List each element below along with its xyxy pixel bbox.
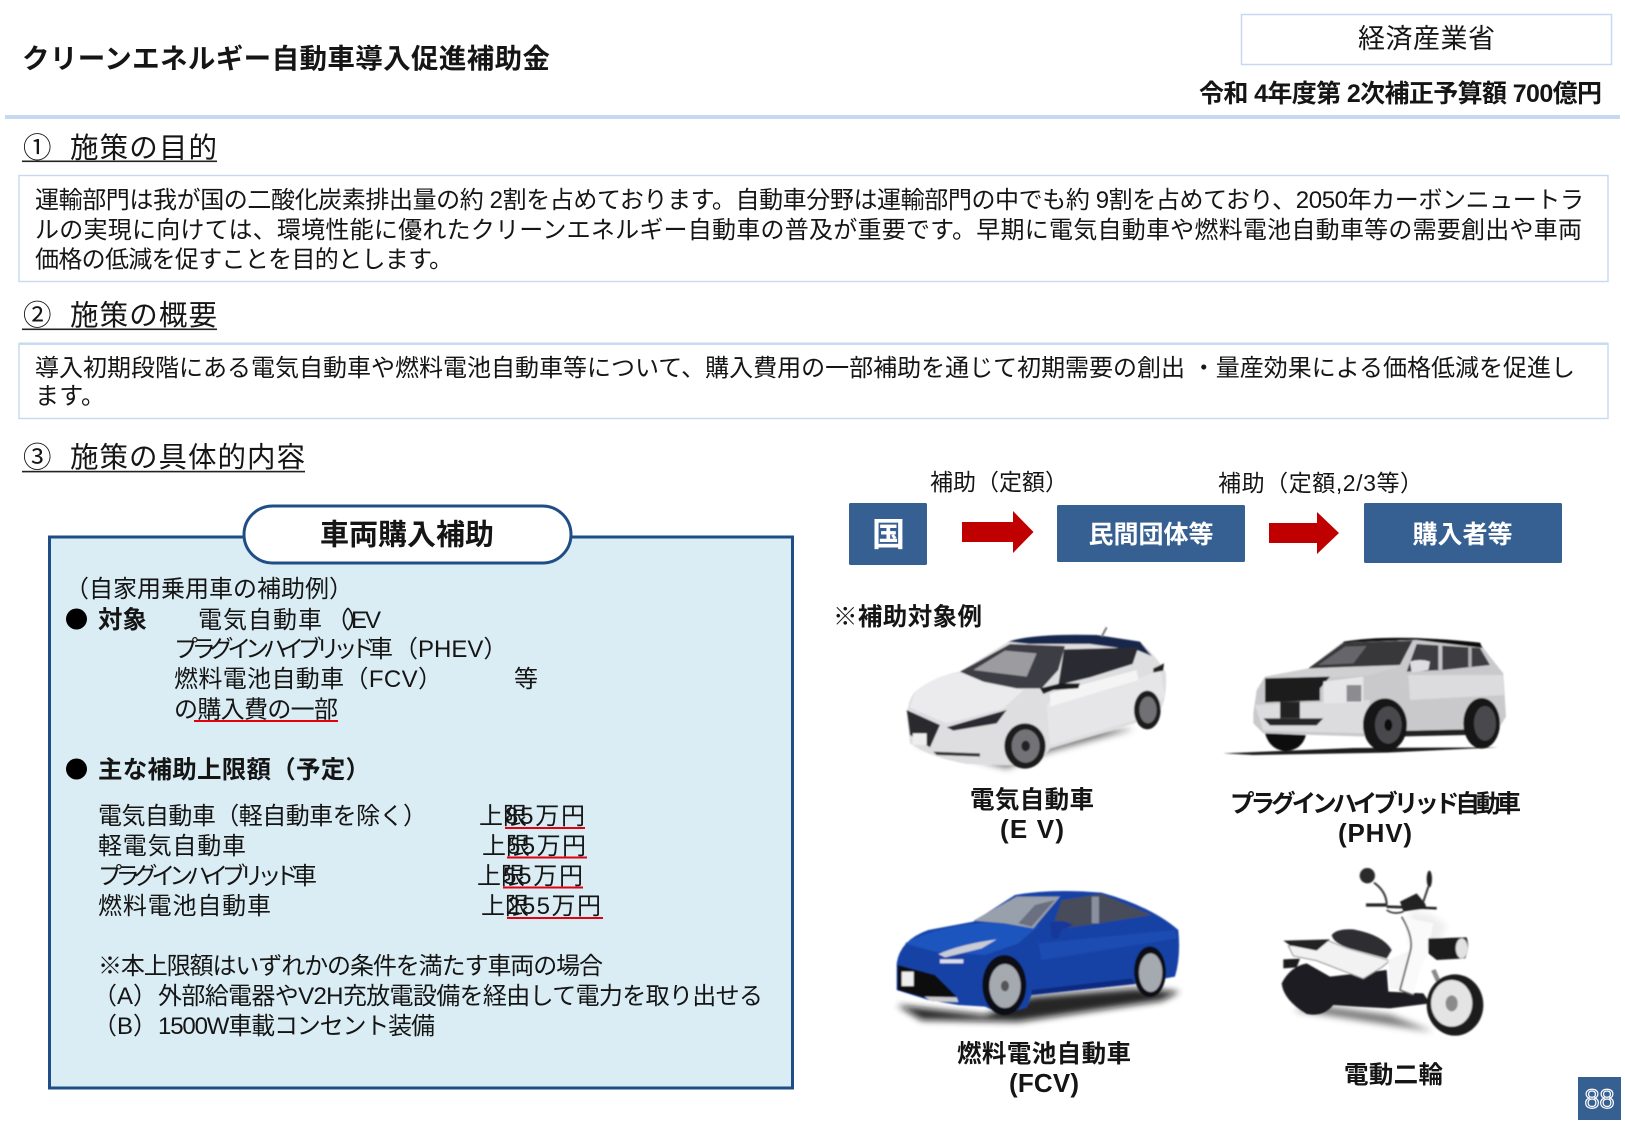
heading: section 1: 施策の目的 (70, 132, 217, 164)
subsidy cap rows: 上限 (481, 893, 529, 920)
flow box: country (849, 503, 927, 565)
page number: 88 (1584, 1084, 1615, 1114)
subsidy cap rows (98, 803, 603, 920)
panel: vehicle purchase subsidy (50, 506, 792, 1088)
panel: overview text: ます。 (35, 383, 105, 410)
flow box: country: 国 (872, 516, 905, 553)
subsidy cap heading: 主な補助上限額（予定） (98, 756, 370, 784)
target vehicles list: の購入費の一部 (174, 696, 338, 724)
subsidy cap rows: 上限 (482, 833, 530, 860)
label: FCV: 燃料電池自動車 (957, 1040, 1131, 1068)
image: electric vehicle (907, 627, 1166, 769)
label: EV: (E V) (1000, 814, 1064, 844)
image: electric scooter (1282, 868, 1483, 1036)
flow label: fixed and two-thirds subsidy: 補助（定額,2/3等） (1218, 470, 1423, 496)
conditions note: 外部給電器やV2H充放電設備を経由して電力を取り出せる (158, 983, 763, 1010)
panel: purpose text (19, 176, 1608, 282)
page number (1578, 1077, 1621, 1120)
heading: section 2: ② (23, 300, 52, 332)
title: クリーンエネルギー自動車導入促進補助金 (22, 43, 550, 74)
ministry label box: 経済産業省 (1358, 24, 1495, 54)
flow box: purchasers (1364, 503, 1562, 563)
target vehicles list: 対象 (98, 606, 147, 634)
panel: overview text: 導入初期段階にある電気自動車や燃料電池自動車等について、購入費用の一部補助を通じて初期需要の創出 ・量産効果による価格低減を促進し (35, 355, 1575, 382)
label: PHV: (PHV) (1338, 818, 1412, 848)
panel: purpose text: 運輸部門は我が国の二酸化炭素排出量の約 2割を占めております。自動車分野は運輸部門の中でも約 9割を占めており、2050年カーボンニュートラ (35, 187, 1584, 214)
subsidy cap rows: 燃料電池自動車 (98, 893, 271, 920)
pill heading: 車両購入補助 (320, 518, 494, 552)
flow box: private organisations: 民間団体等 (1088, 521, 1214, 549)
subsidy cap rows: プラグインハイブリッド車 (98, 863, 317, 890)
label: PHV (1230, 789, 1521, 848)
conditions note (93, 953, 763, 1040)
label: PHV: プラグインハイブリッド自動車 (1230, 789, 1521, 818)
subsidy cap rows: 55万円 (507, 833, 586, 860)
target vehicles list: ） (346, 607, 370, 634)
arrow: country to organisations (962, 511, 1034, 553)
heading: section 3: 施策の具体的内容 (70, 442, 305, 474)
flow label: fixed subsidy: 補助（定額） (930, 469, 1068, 495)
label: electric two-wheeler: 電動二輪 (1344, 1061, 1444, 1089)
target vehicles list: 燃料電池自動車（FCV） (174, 666, 442, 693)
heading: section 1: ① (23, 132, 52, 164)
subsidised examples heading: ※補助対象例 (833, 603, 982, 631)
subsidy cap rows: 255万円 (507, 893, 601, 920)
budget amount: 令和 4年度第 2次補正予算額 700億円 (1199, 80, 1602, 108)
target vehicles list: EV (351, 607, 381, 634)
arrow: organisations to purchasers (1269, 512, 1339, 554)
conditions note: （A） (93, 983, 157, 1010)
heading: section 2: 施策の概要 (70, 300, 217, 332)
target vehicles list: 等 (514, 666, 538, 693)
subsidy cap rows: 55万円 (503, 863, 583, 890)
image: plug-in hybrid vehicle (1223, 638, 1506, 755)
ministry label box (1242, 14, 1612, 64)
subsidy cap rows: 上限 (477, 863, 525, 890)
image: fuel cell vehicle (897, 891, 1180, 1022)
panel: purpose text: ルの実現に向けては、環境性能に優れたクリーンエネルギー自動車の普及が重要です。早期に電気自動車や燃料電池自動車等の需要創出や車両 (35, 217, 1582, 244)
flow box: private organisations (1057, 505, 1245, 562)
subsidy cap rows: 軽電気自動車 (98, 833, 246, 860)
subsidy cap rows: 85万円 (505, 803, 585, 830)
subsidy cap rows: 上限 (479, 803, 527, 830)
example note: （自家用乗用車の補助例） (65, 576, 353, 603)
target vehicles list: プラグインハイブリッド車 (174, 636, 393, 663)
conditions note: 1500W車載コンセント装備 (158, 1013, 435, 1040)
conditions note: （B） (93, 1013, 157, 1040)
target vehicles list: （ (326, 607, 350, 634)
pill heading (244, 506, 571, 563)
label: EV (970, 786, 1094, 844)
panel: purpose text: 価格の低減を促すことを目的とします。 (35, 246, 453, 274)
target vehicles list: （PHEV） (394, 636, 507, 663)
target vehicles list: 電気自動車 (198, 607, 322, 634)
heading: section 3: ③ (23, 442, 52, 474)
label: FCV (957, 1040, 1131, 1098)
flow box: purchasers: 購入者等 (1412, 521, 1512, 549)
subsidy cap rows: 電気自動車（軽自動車を除く） (98, 803, 427, 830)
panel: overview text (19, 342, 1608, 418)
label: EV: 電気自動車 (970, 786, 1094, 814)
target vehicles list (66, 606, 538, 724)
label: FCV: (FCV) (1009, 1068, 1079, 1098)
conditions note: ※本上限額はいずれかの条件を満たす車両の場合 (98, 953, 603, 980)
